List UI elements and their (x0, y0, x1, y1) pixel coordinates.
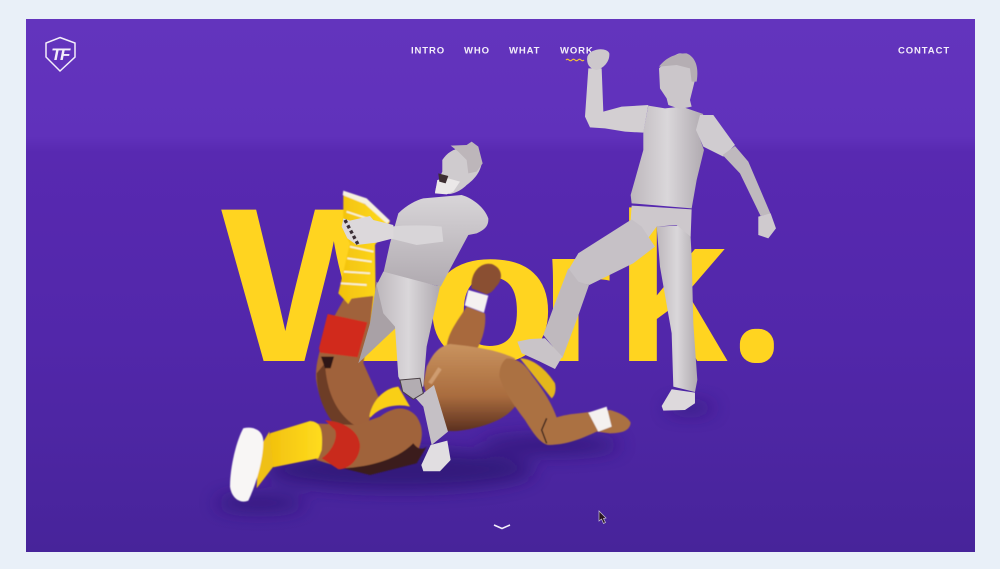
man: torso (383, 195, 488, 287)
wrestler: lower leg, shorts and bands (230, 387, 427, 502)
big headline: Work. (221, 162, 761, 408)
standing man: head and hair (659, 53, 697, 109)
navigation: main links: WORK (560, 46, 594, 56)
floor shadows (215, 403, 715, 511)
logo: TF shield: TF (51, 45, 71, 64)
standing man: pelvis (631, 206, 692, 240)
big headline: Work.: k (615, 170, 728, 406)
figure: wrestler in yellow boots (230, 191, 631, 502)
big headline: Work.: o (424, 190, 557, 403)
man: head and hair (435, 142, 483, 194)
wrestler: raised arm and fist (447, 264, 501, 352)
standing man: front shoe (517, 338, 562, 369)
man: arms and hands (342, 216, 443, 245)
standing man: back leg (657, 225, 697, 392)
big headline: Work.: . (753, 323, 761, 354)
wrestler: red knee band on raised leg (319, 314, 367, 357)
man: pelvis and front leg (377, 272, 440, 390)
standing man: raised shin (543, 268, 589, 358)
standing man: back shoe (662, 389, 695, 411)
man: shoe (421, 441, 451, 471)
big headline: Work.: W (221, 162, 447, 408)
standing man: torso (631, 106, 704, 208)
man: knee joint (400, 378, 423, 399)
standing man: lowered arm (696, 115, 776, 238)
mouse cursor (599, 511, 606, 524)
navigation: main links: WHO (464, 46, 490, 56)
figure: grey man lifting the leg (342, 142, 488, 471)
navigation: active link squiggle (566, 59, 584, 61)
logo: TF shield (46, 38, 75, 71)
scroll-down chevron (494, 525, 510, 528)
navigation: contact link: CONTACT (898, 46, 950, 56)
man: shin (407, 385, 448, 445)
figure: grey man standing with raised fist (517, 49, 776, 411)
navigation: main links (411, 46, 594, 56)
wrestler: torso, extended arm, bandana (423, 344, 631, 445)
wrestler: raised yellow boot with laces (338, 191, 390, 304)
navigation: main links: WHAT (509, 46, 540, 56)
wrestler: raised thigh and lower leg (316, 295, 378, 428)
navigation: main links: INTRO (411, 46, 445, 56)
big headline: Work.: r (540, 187, 612, 403)
standing man: raised arm (585, 49, 648, 133)
man: rear leg (358, 282, 398, 363)
standing man: raised thigh (568, 219, 655, 285)
